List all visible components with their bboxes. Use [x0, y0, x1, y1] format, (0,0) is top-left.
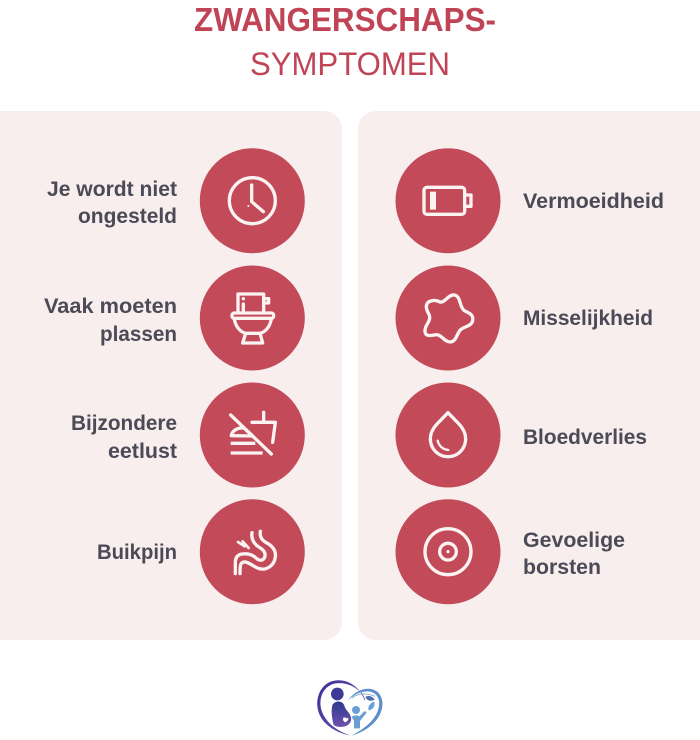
label: Je wordt niet ongesteld: Je wordt niet [47, 178, 177, 201]
label: Gevoelige borsten: Gevoelige [523, 529, 625, 552]
label: Misselijkheid: Misselijkheid [523, 307, 653, 330]
label: Bijzondere eetlust: eetlust [108, 440, 177, 463]
label: Je wordt niet ongesteld: ongesteld [78, 205, 177, 228]
icon: breast target [396, 499, 500, 604]
icon: clock [200, 148, 305, 253]
label: Gevoelige borsten: borsten [523, 556, 601, 579]
label: Vaak moeten plassen: Vaak moeten [44, 295, 177, 318]
label: Bijzondere eetlust: Bijzondere [71, 412, 177, 435]
icon: toilet [200, 266, 305, 370]
title: SYMPTOMEN [250, 46, 450, 82]
title [194, 1, 496, 82]
title: ZWANGERSCHAPS- [194, 1, 496, 38]
icon: nausea blob [396, 266, 500, 370]
label: Vermoeidheid: Vermoeidheid [523, 190, 664, 213]
panel: right symptoms [358, 111, 700, 640]
icon: stomach [200, 499, 305, 604]
icon: blood drop [396, 382, 500, 488]
icon: battery [396, 148, 500, 253]
logo [317, 680, 382, 736]
label: Buikpijn: Buikpijn [97, 541, 177, 564]
icon: no food [200, 382, 305, 488]
label: Vaak moeten plassen: plassen [100, 323, 177, 346]
panel: left symptoms [0, 111, 342, 640]
label: Bloedverlies: Bloedverlies [523, 426, 647, 449]
